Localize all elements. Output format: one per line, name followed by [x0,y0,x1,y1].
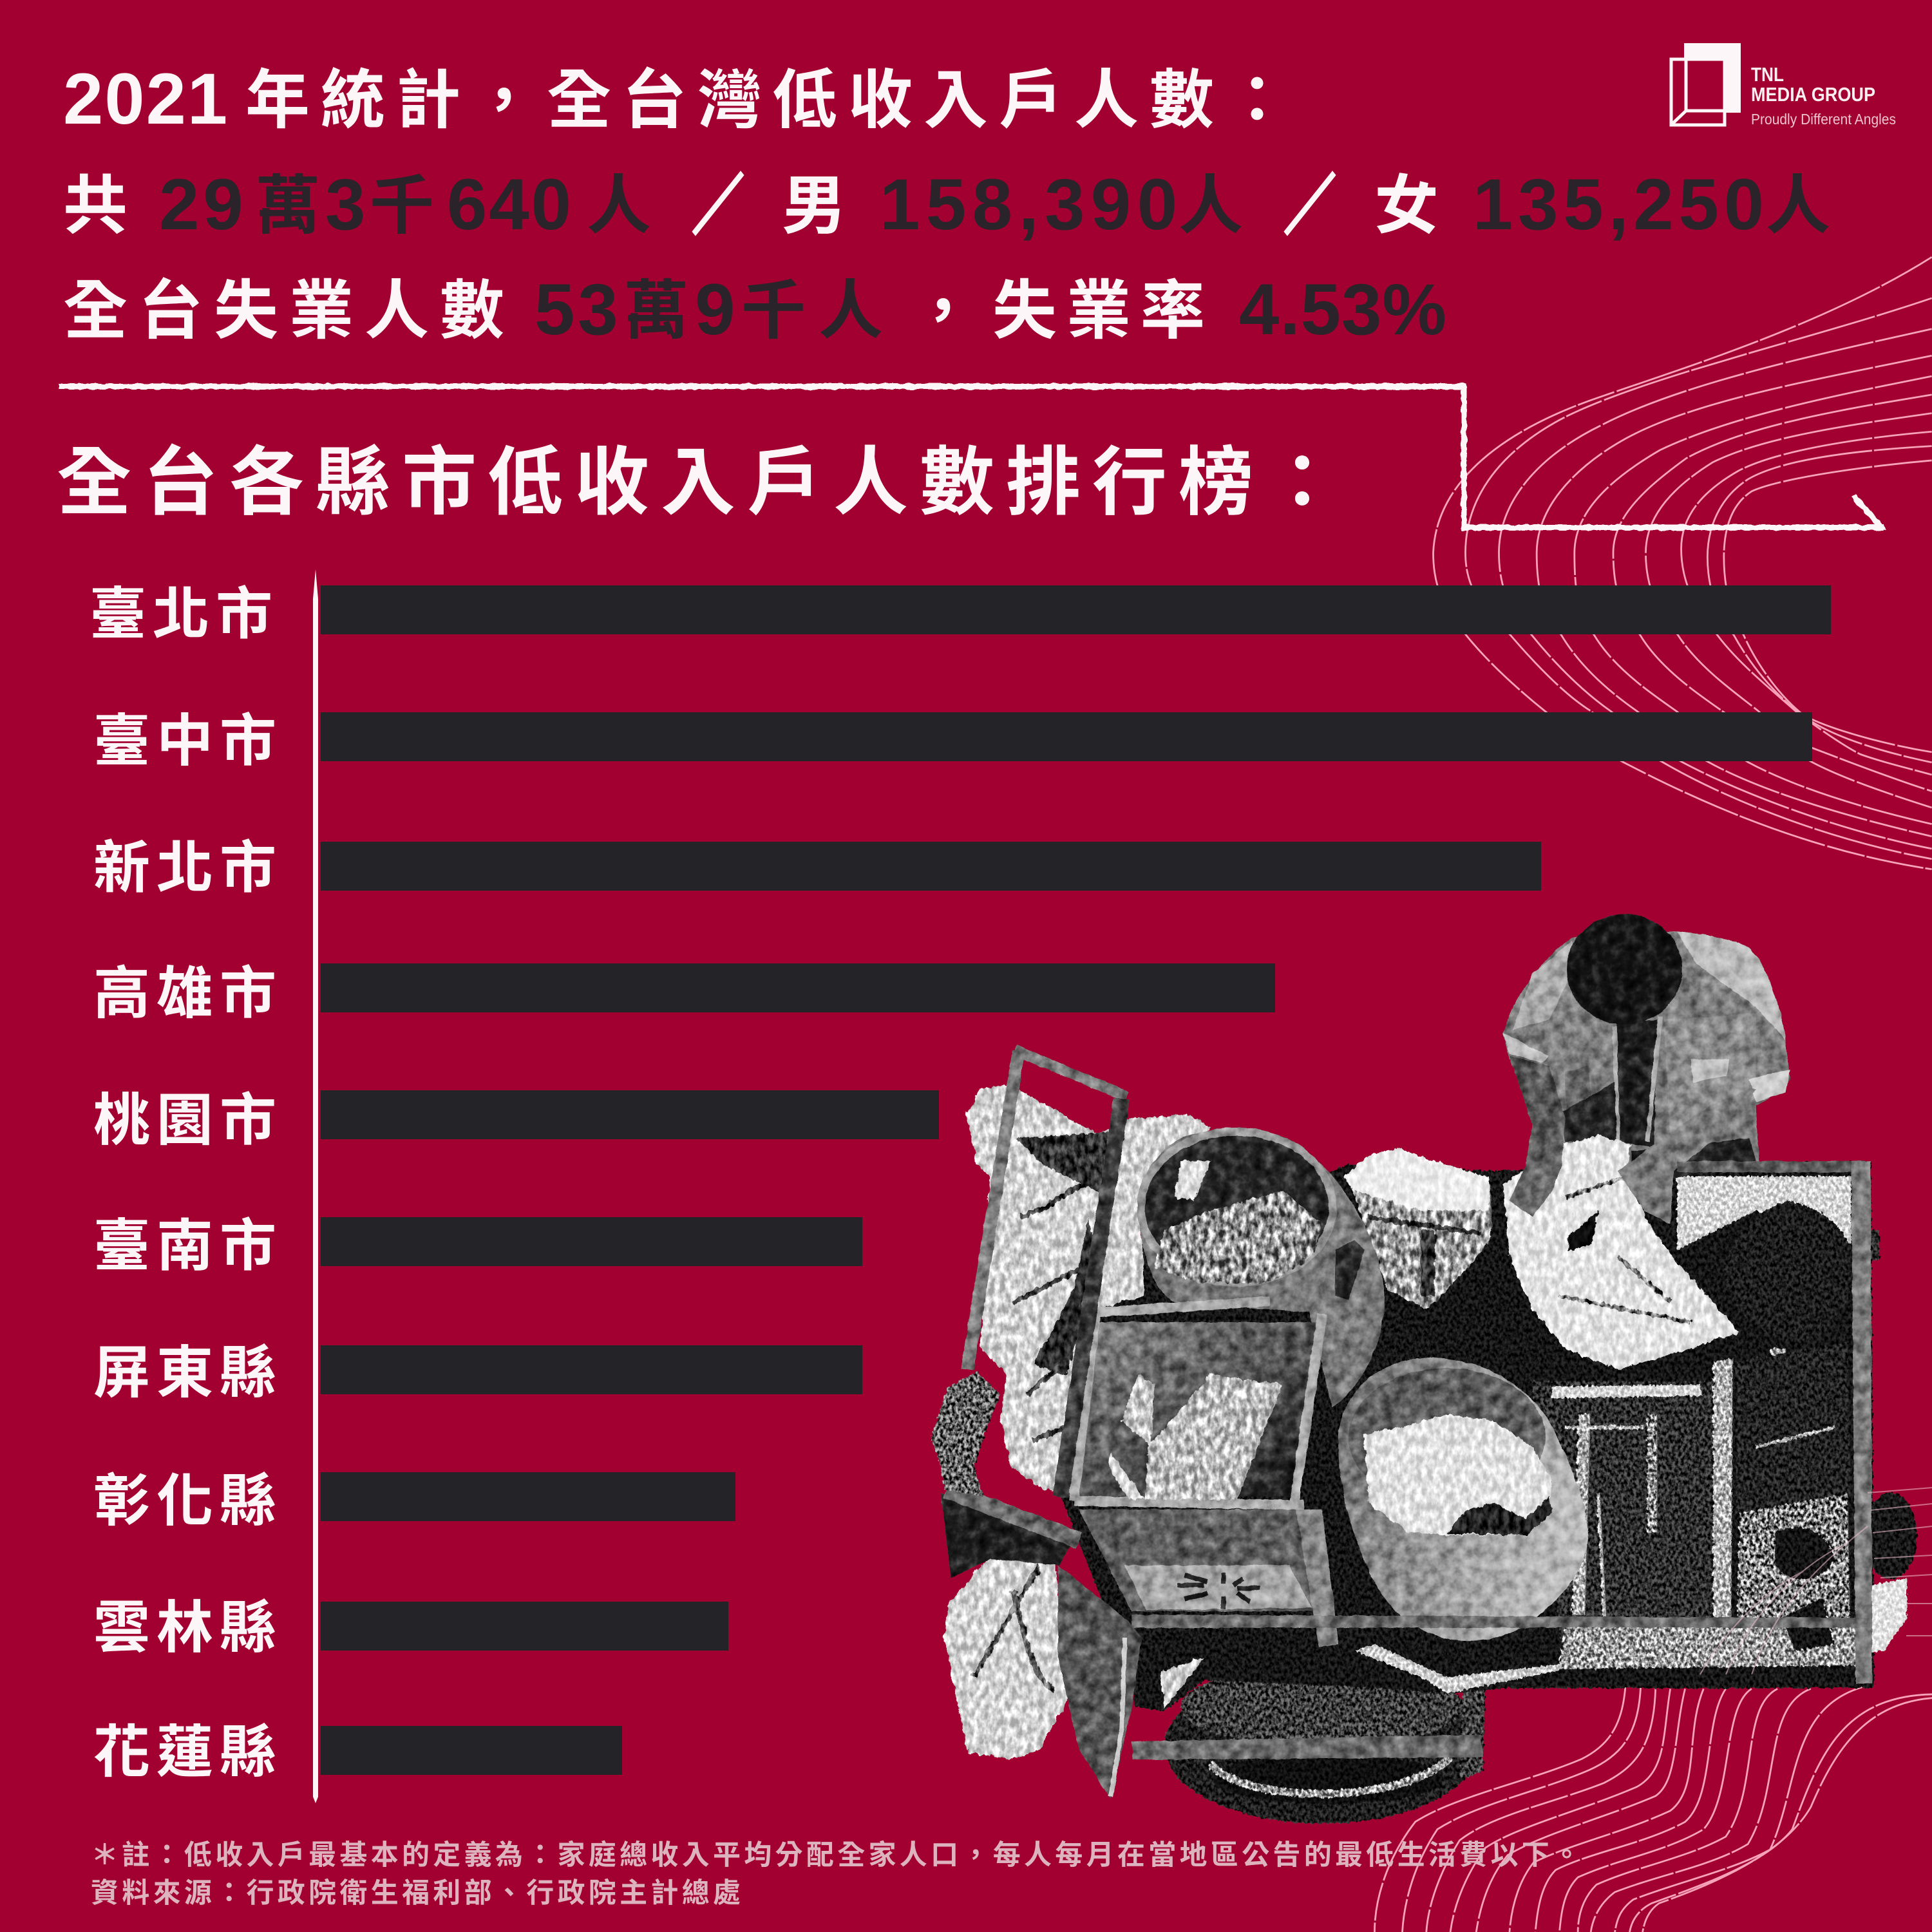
bar row: 花蓮縣: 花蓮縣 [93,1720,283,1784]
bar row: 臺中市: 臺中市 [93,709,283,773]
logo mark [1671,43,1741,125]
bar row: 雲林縣 [93,1596,728,1660]
stats line 2: total, male, female: 千 [370,170,434,242]
stats line 3: unemployment: 千 [741,275,806,347]
bar row: 花蓮縣 [93,1720,622,1784]
bar row: 臺南市 [93,1214,862,1278]
contents of bags and containers [1108,1135,1739,1536]
man's shirt [1503,931,1790,1178]
stats line 2: total, male, female: 萬 [256,170,320,242]
bar row: 屏東縣: 屏東縣 [93,1341,283,1405]
logo wordmark: TNL [1751,63,1784,86]
stats line 2: total, male, female: 640 [447,164,573,245]
stats line 3: unemployment [63,269,1446,350]
containers and man [1058,914,1790,1799]
title block: statistics headline [63,59,1830,350]
stats line 2: total, male, female: ／ [692,171,744,242]
bar row: 高雄市 [93,961,1275,1025]
footnote line 1: ＊註：低收入戶最基本的定義為：家庭總收入平均分配全家人口，每人每月在當地區公告的最低生活費以下。 [91,1840,1584,1871]
bar row: 新北市: 新北市 [93,836,283,900]
stats line 2: total, male, female: 3 [325,164,365,245]
stats line 2: total, male, female: 135,250 [1473,164,1764,245]
stats line 2: total, male, female: 男 [782,170,846,242]
stats line 2: total, male, female: 人 [1179,170,1243,242]
stats line 3: unemployment: 53 [535,269,621,350]
bar chart: low income population by county [90,582,1831,1784]
sacks beside the cart handle [944,1084,1492,1759]
stats line 2: total, male, female: 人 [587,170,651,242]
stats line 2: total, male, female [63,164,1830,245]
cushion hanging at side [1058,1566,1141,1799]
decorative flow lines: upper right [1434,257,1932,869]
stats line 2: total, male, female: 29 [159,164,247,245]
bar row: 雲林縣: 雲林縣 [93,1596,283,1660]
barrel [1138,1133,1385,1408]
stats line 3: unemployment: 4.53% [1239,269,1446,350]
stats line 2: total, male, female: 人 [1766,170,1830,242]
man's arms and hands [1510,1056,1756,1224]
stats line 3: unemployment: 萬 [624,275,688,347]
square bin [1074,1322,1322,1496]
bar row: 新北市 [93,836,1541,900]
bar row: 桃園市: 桃園市 [93,1088,283,1152]
logo wordmark [1751,63,1896,128]
faint flow lines over the photo [1700,1488,1932,1674]
man's head [1567,914,1682,1025]
bar row: 高雄市: 高雄市 [93,961,283,1025]
title line 1: 年統計，全台灣低收入戶人數： [245,64,1300,137]
stats line 2: total, male, female: 女 [1374,170,1439,242]
stats line 2: total, male, female: ／ [1284,171,1336,242]
logo: TNL Media Group [1671,43,1896,128]
footnote: definition and data sources [91,1840,1584,1909]
title line 1: 2021 [63,59,229,139]
illustration: man sorting recyclables on a cart [931,914,1917,1824]
divider bracket with arrow tick [59,386,1887,529]
bar row: 臺南市: 臺南市 [93,1214,283,1278]
bar row: 臺北市: 臺北市 [90,582,279,646]
logo wordmark: MEDIA GROUP [1751,83,1875,106]
cart wheel and deck [1059,1161,1917,1824]
stats line 2: total, male, female: 共 [63,170,128,242]
footnote line 2: 資料來源：行政院衛生福利部、行政院主計總處 [91,1878,744,1909]
round bucket [1338,1358,1588,1641]
cloth wrapped handle grip [931,1372,1000,1496]
bar row: 屏東縣 [93,1341,862,1405]
bar row: 臺中市 [93,709,1812,773]
chart axis [313,569,318,1803]
cart frame and handle [941,1050,1872,1760]
decorative flow lines: lower right [1374,1678,1932,1932]
stats line 2: total, male, female: 158,390 [880,164,1177,245]
stats line 3: unemployment: 失業率 [992,275,1215,347]
bar row: 桃園市 [93,1088,939,1152]
section heading: county ranking: 全台各縣市低收入戶人數排行榜： [57,440,1351,524]
bar row: 臺北市 [90,582,1831,646]
stats line 3: unemployment: ， [911,275,975,347]
bar row: 彰化縣 [93,1469,735,1533]
stats line 3: unemployment: 人 [819,275,883,347]
logo wordmark: Proudly Different Angles [1751,111,1896,128]
bar row: 彰化縣: 彰化縣 [93,1469,283,1533]
stats line 3: unemployment: 全台失業人數 [63,275,515,347]
stats line 3: unemployment: 9 [695,269,735,350]
